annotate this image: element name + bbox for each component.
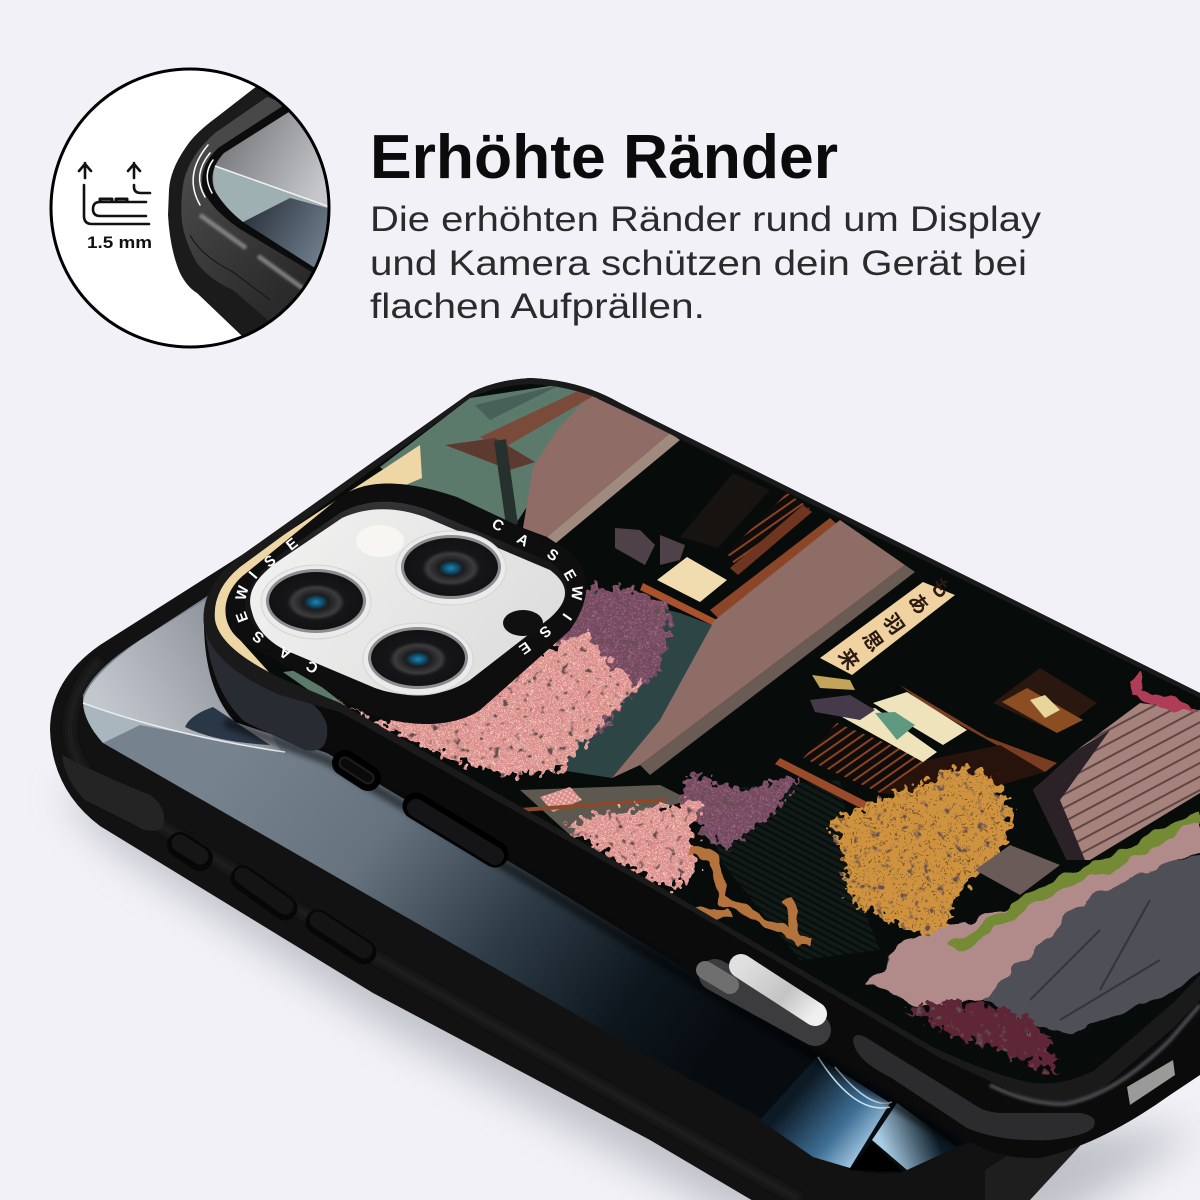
CASEWISE lettering: W: [567, 585, 586, 602]
crimson shrubs: [905, 1000, 1060, 1075]
CASEWISE lettering: A: [276, 642, 294, 663]
label: 1.5 mm: 1.5 mm: [87, 233, 152, 252]
corner guard: [62, 755, 164, 831]
lower right highlights: [1127, 1060, 1175, 1105]
camera surround: [225, 483, 586, 724]
garden bench: [975, 845, 1060, 895]
side wall: [204, 378, 1200, 1158]
lower beam and lattice: [900, 685, 1057, 772]
front phone with case: [200, 378, 1200, 1158]
moss strip: [950, 812, 1200, 952]
mute switch: [345, 763, 368, 778]
CASEWISE lettering: E: [516, 638, 534, 658]
lens right: [396, 531, 506, 605]
lower building stripes: [700, 780, 880, 960]
upper roof: [523, 395, 670, 537]
reflections on display: [760, 1057, 890, 1168]
sensor hole: [503, 610, 543, 636]
CASEWISE lettering: E: [283, 535, 301, 554]
ring foreground lower right: [355, 600, 572, 724]
case body: [50, 480, 1050, 1200]
purple blossom: [555, 587, 672, 733]
case face / bezel: [204, 378, 1200, 1102]
black ring: [225, 483, 586, 723]
upper lattice: [728, 494, 810, 563]
back cover artwork: pixel-art Japanese street: 羽: [878, 610, 908, 639]
back phone with case: [50, 480, 1200, 1200]
CASEWISE lettering: I: [559, 610, 575, 623]
CASEWISE lettering: S: [261, 552, 279, 571]
lantern window: [993, 668, 1097, 733]
back phone display: [83, 490, 1100, 1174]
back cover artwork: pixel-art Japanese street: も: [925, 574, 955, 603]
cream shop window: [842, 692, 967, 762]
sage sky: [380, 383, 600, 525]
close-up of case corner: [168, 85, 340, 337]
heading: Erhöhte Ränder: [370, 123, 838, 192]
wooden frame: [710, 518, 838, 618]
lower roof: [612, 520, 905, 778]
CASEWISE lettering: C: [303, 656, 321, 677]
impact arcs: [193, 145, 213, 205]
purple shadow patch: [615, 528, 685, 565]
pink stone path: [867, 815, 1200, 1008]
CASEWISE lettering: S: [249, 627, 267, 647]
drop shadow: [60, 790, 1200, 1200]
CASEWISE lettering: S: [544, 545, 562, 565]
pink blossom: [330, 632, 640, 775]
back cover artwork: pixel-art Japanese street: 思: [857, 627, 887, 656]
ground and low branch: [520, 785, 690, 835]
red flowers: [1127, 672, 1200, 712]
back cover artwork: pixel-art Japanese street: あ: [903, 589, 933, 619]
mauve blossom: [680, 773, 800, 850]
orange tree: [828, 767, 1013, 947]
cream window: [657, 557, 727, 602]
dark teal behind cherry: [560, 590, 712, 778]
sage foot strip: [283, 670, 345, 705]
lower pink blossom: [567, 803, 703, 890]
sign: [820, 582, 955, 675]
power button: [416, 806, 495, 856]
description text: flachen Aufprällen.: [370, 287, 705, 326]
CASEWISE lettering: E: [560, 567, 579, 584]
description text: Die erhöhten Ränder rund um Display: [370, 200, 1042, 239]
camera bump side patch: [205, 625, 327, 751]
detail circle: raised edge close-up: [51, 69, 340, 347]
CASEWISE lettering: S: [536, 622, 554, 641]
lens bottom: [363, 623, 473, 695]
cream mountain: [214, 445, 422, 672]
charging port: [705, 966, 815, 1030]
icon: raised edge cross-section: [79, 163, 150, 224]
screen shadow under phone: [225, 722, 960, 1145]
CASEWISE lettering: C: [489, 515, 507, 536]
lower right glint: [985, 1135, 1090, 1200]
CASEWISE lettering: [232, 515, 586, 677]
CASEWISE lettering: I: [246, 568, 261, 582]
back cover artwork: pixel-art Japanese street: 来: [833, 644, 863, 674]
CASEWISE lettering: A: [514, 530, 532, 551]
side buttons: [180, 843, 364, 952]
description text: und Kamera schützen dein Gerät bei: [370, 244, 1027, 283]
grey rock: [983, 850, 1200, 1033]
corner highlight: [990, 1005, 1200, 1104]
description text: [370, 200, 1042, 326]
lens left: [261, 565, 371, 639]
CASEWISE lettering: W: [232, 583, 253, 602]
lens plate: [250, 509, 565, 695]
flash: [356, 525, 404, 557]
trunk: [688, 846, 812, 947]
CASEWISE lettering: E: [233, 609, 252, 624]
corner guard bottom right: [853, 1035, 1095, 1140]
shop label: [875, 712, 915, 740]
back cover artwork: pixel-art Japanese street: [200, 380, 1200, 1100]
lantern trio: [812, 675, 855, 690]
stairs: [1033, 703, 1200, 860]
